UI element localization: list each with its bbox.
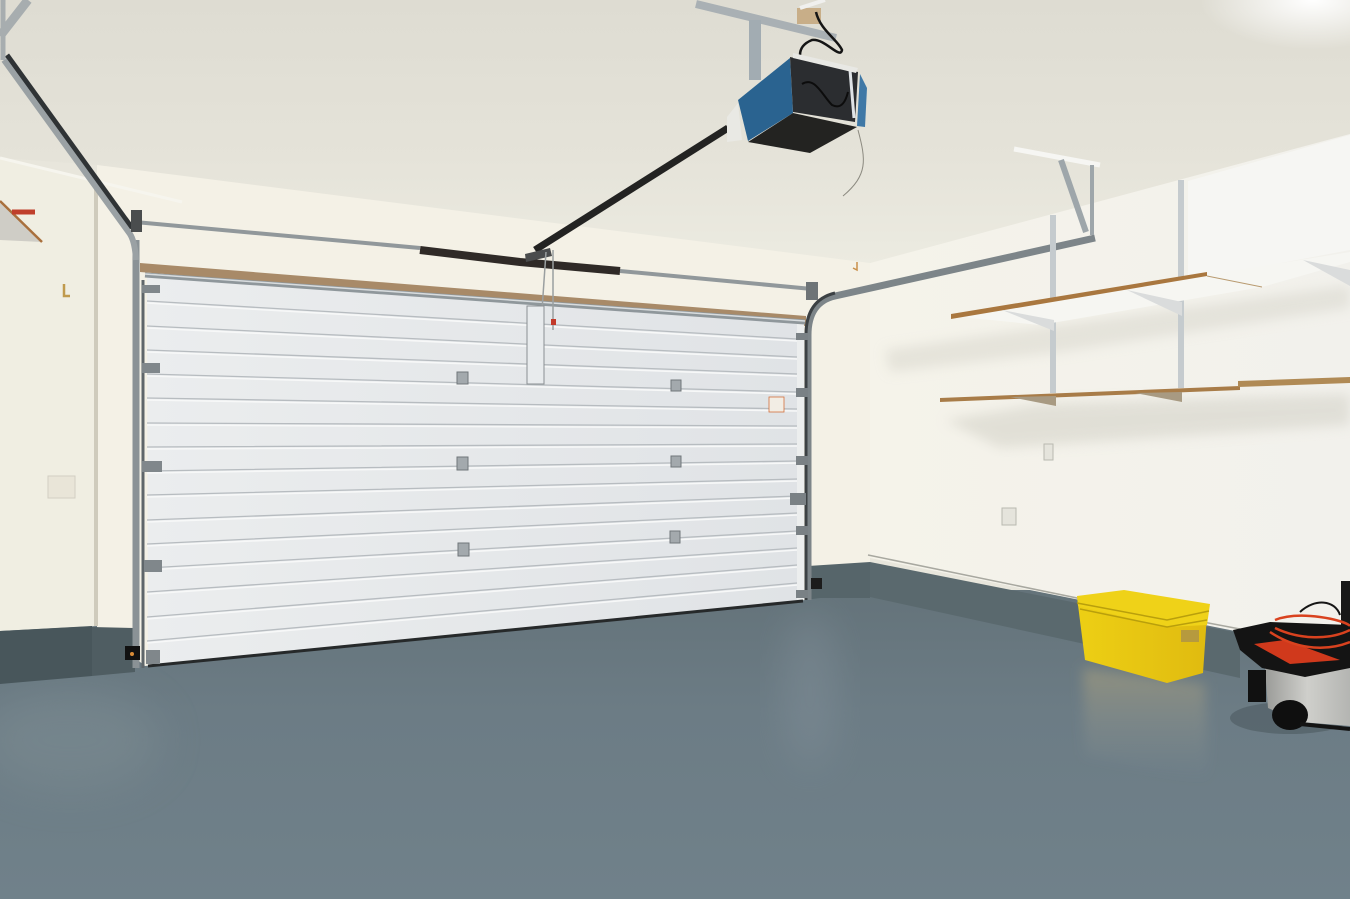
back wall hook — [853, 262, 857, 270]
wall switch plates — [48, 444, 1053, 525]
door hinges — [457, 372, 681, 556]
wet vacuum — [1230, 581, 1350, 734]
right wall — [870, 134, 1350, 650]
door arm — [527, 250, 556, 384]
left wall hook — [64, 284, 70, 296]
opener ceiling bracket — [696, 0, 842, 80]
outlet box on left baseboard — [125, 646, 140, 660]
right door spring bracket — [1014, 149, 1100, 235]
garage door — [145, 274, 805, 666]
upper shelf — [951, 252, 1350, 331]
floor — [0, 590, 1350, 899]
left baseboards — [0, 626, 135, 684]
torsion bar and spring — [131, 210, 818, 300]
vacuum drum — [1265, 668, 1350, 726]
door panel shadow lines — [147, 301, 797, 641]
orange cord coil — [1254, 640, 1340, 664]
lower shelf — [940, 377, 1350, 406]
left wall — [0, 158, 97, 631]
wall corner pier — [96, 185, 135, 626]
right vertical track — [790, 238, 1095, 600]
cord loop — [1300, 603, 1340, 615]
back wall — [97, 165, 870, 666]
top door rail — [145, 275, 805, 322]
vacuum shadow — [1230, 702, 1350, 734]
shelving uprights — [1050, 180, 1184, 393]
upper shelf shadow — [885, 285, 1350, 372]
opener rail — [525, 128, 728, 262]
header wood trim above door — [140, 263, 806, 326]
door jamb strip — [797, 322, 804, 600]
yellow storage bin — [1077, 590, 1210, 683]
floor reflection of bin — [1083, 668, 1208, 780]
shelf shadows — [945, 394, 1350, 448]
rake on left wall — [0, 201, 42, 242]
outlet box on rear baseboard — [811, 578, 822, 589]
left overhead track — [4, 55, 136, 260]
warning label — [769, 397, 784, 412]
bottom door seal — [148, 601, 803, 666]
left vertical track — [136, 240, 162, 668]
garage door opener — [727, 53, 867, 196]
vacuum pipe — [1341, 581, 1350, 641]
vacuum black lid ring — [1233, 622, 1350, 677]
caster and wheel — [1272, 700, 1308, 730]
left overhead track upper bracket — [0, 0, 28, 60]
white rod on left wall — [0, 158, 182, 202]
rear and right baseboards — [805, 555, 1240, 678]
ceiling — [0, 0, 1350, 263]
